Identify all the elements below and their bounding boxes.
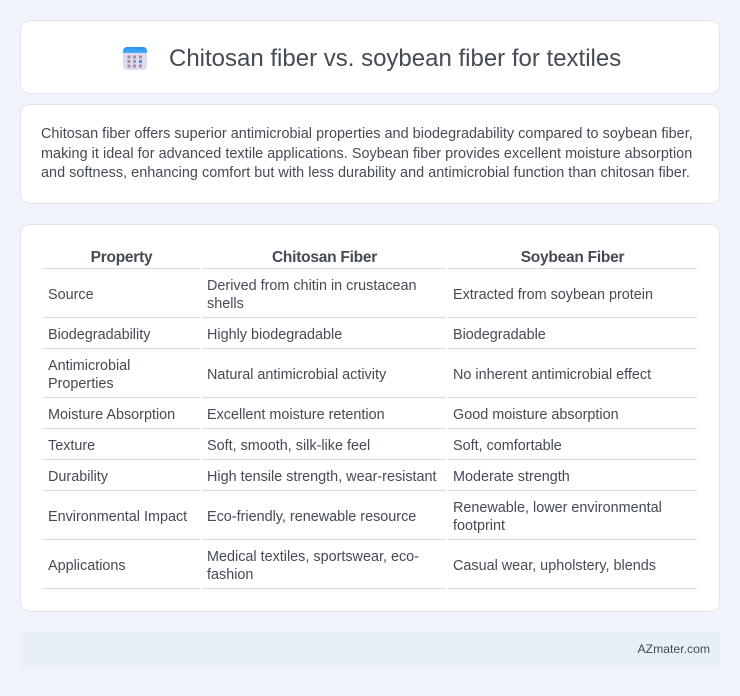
comparison table [43, 249, 697, 589]
comparison table: Biodegradable [453, 327, 546, 343]
comparison table: Durability [48, 469, 108, 485]
comparison table: Moisture Absorption [48, 407, 175, 423]
comparison table: Soft, comfortable [453, 438, 562, 454]
comparison table: High tensile strength, wear-resistant [207, 469, 437, 485]
title card [20, 20, 720, 94]
comparison table: Natural antimicrobial activity [207, 367, 386, 383]
summary text [41, 126, 693, 181]
summary text: making it ideal for advanced textile applications. Soybean fiber provides excellent moisture absorption [41, 146, 692, 162]
comparison table: Excellent moisture retention [207, 407, 385, 423]
summary card [20, 104, 720, 204]
comparison table: Texture [48, 438, 95, 454]
comparison table: Soybean Fiber [521, 249, 624, 266]
comparison table: Eco-friendly, renewable resource [207, 509, 416, 525]
table card [20, 224, 720, 612]
comparison table: Biodegradability [48, 327, 150, 343]
comparison table: Renewable, lower environmental [453, 500, 662, 516]
icon: calendar [123, 47, 147, 70]
comparison table: Property [91, 249, 152, 266]
summary text: and softness, enhancing comfort but with less durability and antimicrobial function than chitosan fiber. [41, 165, 690, 181]
comparison table: Antimicrobial [48, 358, 130, 374]
summary text: Chitosan fiber offers superior antimicrobial properties and biodegradability compared to soybean fiber, [41, 126, 693, 142]
footer credit: AZmater.com [638, 642, 710, 656]
comparison table: Highly biodegradable [207, 327, 342, 343]
footer bar [20, 632, 720, 666]
comparison table: Soft, smooth, silk-like feel [207, 438, 370, 454]
comparison table: Casual wear, upholstery, blends [453, 558, 656, 574]
comparison table: fashion [207, 567, 253, 583]
comparison table: Properties [48, 376, 114, 392]
title: Chitosan fiber vs. soybean fiber for textiles [169, 45, 621, 72]
comparison table: footprint [453, 518, 505, 534]
comparison table: Moderate strength [453, 469, 570, 485]
comparison table: Medical textiles, sportswear, eco- [207, 549, 419, 565]
comparison table: Environmental Impact [48, 509, 187, 525]
comparison table: shells [207, 296, 244, 312]
comparison table: Chitosan Fiber [272, 249, 377, 266]
comparison table: No inherent antimicrobial effect [453, 367, 651, 383]
comparison table: Extracted from soybean protein [453, 287, 653, 303]
comparison table: Good moisture absorption [453, 407, 619, 423]
comparison table: Derived from chitin in crustacean [207, 278, 417, 294]
comparison table: Applications [48, 558, 126, 574]
comparison table: Source [48, 287, 94, 303]
